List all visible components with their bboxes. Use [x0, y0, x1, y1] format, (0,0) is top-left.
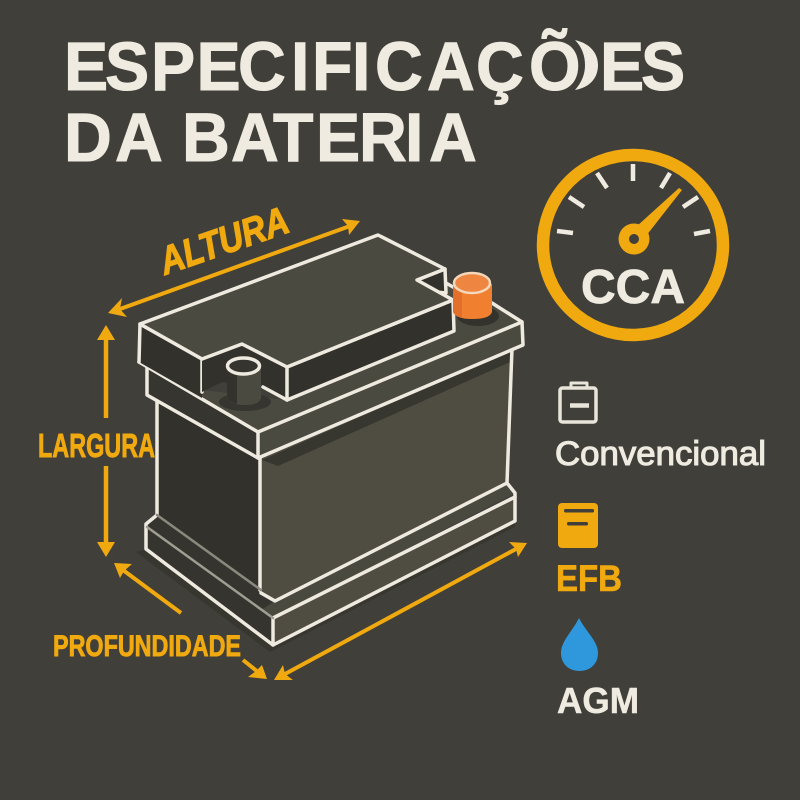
- battery base: [146, 483, 515, 645]
- gauge needle: [618, 188, 682, 254]
- title: ESPECIFICAÇÕES: [64, 27, 685, 105]
- battery ground shadow: [136, 518, 515, 652]
- icon: EFB battery: [558, 503, 598, 548]
- icon: AGM water drop: [561, 618, 598, 671]
- positive terminal: [453, 273, 499, 326]
- battery lid: [139, 235, 454, 400]
- gauge ring: [543, 155, 723, 335]
- gauge ticks: [557, 164, 710, 234]
- arrow: profundidade upper: [114, 563, 181, 613]
- title: [64, 27, 685, 176]
- gauge label: CCA: [581, 261, 685, 314]
- CCA gauge: [543, 155, 723, 335]
- arrow: largura lower: [97, 466, 115, 557]
- arrow: altura: [108, 219, 360, 317]
- arrow: bottom length: [274, 542, 527, 680]
- battery cover rim: [139, 283, 523, 458]
- title: DA BATERIA: [64, 100, 477, 176]
- label: altura: ALTURA: [153, 199, 295, 284]
- label: AGM: AGM: [557, 680, 639, 721]
- battery illustration: [136, 235, 523, 652]
- label: largura: LARGURA: [38, 427, 155, 464]
- battery body: [157, 348, 512, 601]
- arrow: largura upper: [97, 325, 115, 418]
- negative terminal: [219, 358, 271, 411]
- arrow: profundidade lower: [243, 660, 267, 679]
- icon: conventional battery: [560, 383, 596, 422]
- label: profundidade: PROFUNDIDADE: [53, 630, 241, 663]
- label: EFB: EFB: [556, 558, 622, 599]
- label: convencional: Convencional: [555, 435, 766, 473]
